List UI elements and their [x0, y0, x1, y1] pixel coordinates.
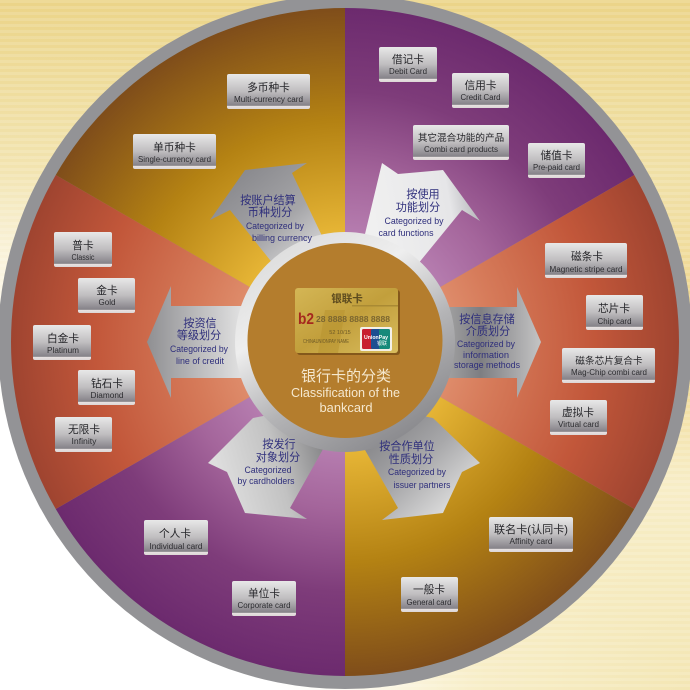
arrow text: card functions: Categorized by [384, 216, 444, 226]
label: Virtual card: Virtual card [558, 419, 599, 429]
label: Pre-paid card [528, 143, 585, 178]
label: Classic: Classic [72, 252, 95, 262]
label: Individual card: Individual card [150, 541, 203, 551]
label: Infinity [55, 417, 112, 452]
arrow: line of credit [147, 286, 255, 398]
arrow text: card functions: card functions [378, 228, 434, 238]
label: General card: 一般卡 [413, 583, 445, 596]
label: Combi card products: Combi card products [424, 144, 498, 154]
arrow text: line of credit: 按资信 [183, 316, 217, 330]
bank card illustration [295, 288, 400, 355]
label: Debit Card: 借记卡 [392, 53, 424, 66]
label: Magnetic stripe card: 磁条卡 [571, 250, 603, 263]
sector: card functions [345, 8, 634, 342]
label: Credit Card: 信用卡 [464, 79, 497, 92]
arrow text: storage methods: Categorized by [457, 339, 516, 349]
arrow text: line of credit: line of credit [176, 356, 225, 366]
icon: UnionPay logo: UnionPay [364, 335, 389, 341]
label: Platinum: 白金卡 [47, 332, 79, 345]
arrow text: storage methods: 介质划分 [466, 325, 510, 338]
label: Diamond: 钻石卡 [91, 377, 123, 390]
label: Corporate card: Corporate card [238, 600, 291, 610]
label: Affinity card: Affinity card [510, 536, 553, 546]
label: Mag-Chip combi card [562, 348, 655, 383]
label: Chip card [586, 295, 643, 330]
arrow: card functions [345, 163, 480, 300]
sector: cardholders [56, 342, 345, 676]
arrow text: issuer partners: Categorized by [388, 467, 447, 477]
icon: UnionPay logo [360, 327, 392, 351]
label: Single-currency card: Single-currency card [138, 154, 211, 164]
arrow text: issuer partners: issuer partners [394, 480, 451, 490]
label: Virtual card [550, 400, 607, 435]
label: Corporate card [232, 581, 296, 616]
arrow text: billing currency: billing currency [252, 233, 313, 243]
hub ring [235, 232, 455, 452]
arrow: billing currency [210, 163, 345, 300]
label: Gold [78, 278, 135, 313]
arrow text: billing currency [240, 193, 313, 243]
label: Multi-currency card: Multi-currency card [234, 94, 303, 104]
hub title: 银行卡的分类 [301, 368, 391, 385]
label: Single-currency card [133, 134, 216, 169]
label: Diamond [78, 370, 135, 405]
arrow text: card functions: 功能划分 [396, 200, 440, 214]
label: Individual card [144, 520, 208, 555]
label: Platinum: Platinum [47, 345, 79, 355]
arrow: cardholders [208, 400, 345, 519]
label: General card [401, 577, 458, 612]
label: Debit Card [379, 47, 437, 82]
bank card illustration: b2 [298, 311, 314, 328]
label: Affinity card: 联名卡(认同卡) [494, 523, 568, 536]
arrow text: billing currency: Categorized by [246, 221, 305, 231]
arrow text: line of credit [170, 316, 229, 366]
label: Multi-currency card [227, 74, 310, 109]
arrow text: cardholders [238, 437, 300, 486]
label: Combi card products [413, 125, 509, 160]
arrow text: cardholders: 对象划分 [256, 450, 300, 464]
label: General card: General card [406, 597, 452, 607]
label: Debit Card: Debit Card [389, 66, 427, 76]
arrow text: storage methods: information [463, 350, 509, 360]
label: Platinum [33, 325, 91, 360]
label: Individual card: 个人卡 [159, 527, 191, 540]
label: Single-currency card: 单币种卡 [153, 141, 196, 154]
label: Magnetic stripe card [545, 243, 627, 278]
arrow text: line of credit: Categorized by [170, 344, 229, 354]
label: Classic [54, 232, 112, 267]
arrow text: issuer partners [379, 439, 451, 490]
bank card illustration: CHINAUNIONPAY NAME [303, 339, 350, 345]
arrow: storage methods [435, 287, 541, 398]
arrow: issuer partners [345, 400, 480, 520]
arrow text: storage methods: 按信息存储 [459, 312, 515, 326]
sector: storage methods [345, 175, 679, 509]
label: Classic: 普卡 [72, 239, 94, 252]
label: Multi-currency card: 多币种卡 [247, 81, 290, 94]
label: Affinity card [489, 517, 573, 552]
label: Diamond: Diamond [90, 390, 124, 400]
label: Mag-Chip combi card: 磁条芯片复合卡 [575, 355, 643, 367]
bank card illustration: 银联卡 [331, 292, 363, 305]
sector: line of credit [11, 175, 345, 509]
arrow text: cardholders: 按发行 [262, 437, 296, 451]
arrow text: cardholders: by cardholders [238, 476, 295, 486]
label: Infinity: Infinity [72, 436, 97, 446]
arrow text: card functions: 按使用 [406, 187, 440, 201]
arrow text: storage methods: storage methods [454, 360, 521, 370]
arrow text: issuer partners: 按合作单位 [379, 439, 435, 453]
arrow text: cardholders: Categorized [244, 465, 292, 475]
arrow text: billing currency: 按账户结算 [240, 193, 296, 207]
arrow text: storage methods [454, 312, 521, 370]
label: Pre-paid card: Pre-paid card [533, 162, 580, 172]
label: Magnetic stripe card: Magnetic stripe card [550, 264, 623, 274]
icon: UnionPay logo: 银联 [377, 340, 387, 347]
bank card illustration: 28 8888 8888 8888 [316, 315, 391, 324]
label: Combi card products: 其它混合功能的产品 [418, 132, 504, 144]
label: Gold: 金卡 [96, 284, 118, 297]
hub title: bankcard [320, 401, 373, 415]
label: Credit Card [452, 73, 509, 108]
arrow text: billing currency: 币种划分 [248, 205, 292, 219]
label: Mag-Chip combi card: Mag-Chip combi card [571, 367, 647, 377]
sector: billing currency [56, 8, 345, 342]
hub title: Classification of the [291, 386, 400, 400]
arrow text: issuer partners: 性质划分 [389, 452, 433, 466]
bank card illustration: 52 10/15 [329, 330, 351, 336]
label: Corporate card: 单位卡 [248, 587, 280, 600]
arrow text: line of credit: 等级划分 [177, 328, 221, 342]
label: Pre-paid card: 储值卡 [540, 149, 573, 162]
label: Virtual card: 虚拟卡 [562, 406, 594, 419]
hub circle [248, 243, 442, 438]
label: Chip card: Chip card [598, 316, 632, 326]
arrow text: card functions [378, 187, 444, 238]
label: Chip card: 芯片卡 [598, 302, 630, 315]
hub title [291, 368, 400, 415]
label: Gold: Gold [98, 297, 116, 307]
label: Infinity: 无限卡 [68, 423, 100, 436]
label: Credit Card: Credit Card [460, 92, 501, 102]
sector: issuer partners [345, 342, 634, 676]
